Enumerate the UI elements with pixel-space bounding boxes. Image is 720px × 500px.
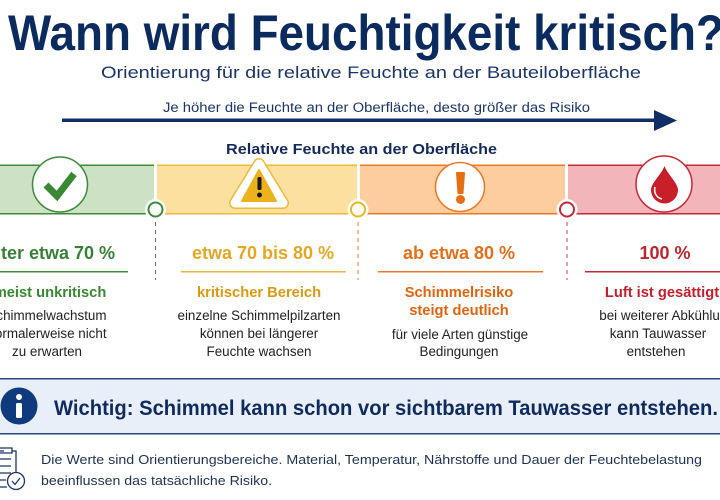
column: 100 %: Luft ist gesättigt bbox=[605, 285, 719, 301]
icon: info bbox=[0, 388, 38, 424]
column: ab etwa 80 %: für viele Arten günstige bbox=[392, 327, 528, 342]
arrow caption: Je höher die Feuchte an der Oberfläche, desto größer das Risiko bbox=[163, 100, 590, 115]
marker: green threshold bbox=[145, 199, 166, 280]
icon: exclamation circle bbox=[436, 162, 484, 212]
footnote: beeinflussen das tatsächliche Risiko. bbox=[41, 473, 272, 488]
column: 100 %: 100 % bbox=[639, 243, 691, 263]
panel: green band bbox=[0, 164, 154, 214]
column: etwa 70 bis 80 %: können bei längerer bbox=[200, 326, 319, 341]
column: unter etwa 70 %: zu erwarten bbox=[12, 344, 82, 359]
footnote bbox=[41, 452, 702, 488]
column: etwa 70 bis 80 %: Feuchte wachsen bbox=[207, 344, 311, 359]
column: etwa 70 bis 80 %: einzelne Schimmelpilzarten bbox=[178, 308, 340, 323]
icon: warning triangle bbox=[235, 164, 283, 203]
column: etwa 70 bis 80 % bbox=[178, 243, 346, 359]
icon: water drop bbox=[636, 156, 692, 212]
panel: orange band bbox=[360, 164, 565, 214]
column: unter etwa 70 % bbox=[0, 243, 128, 359]
column: 100 %: entstehen bbox=[627, 344, 685, 359]
panel: yellow band bbox=[157, 164, 357, 214]
column: ab etwa 80 % bbox=[378, 243, 543, 359]
column: ab etwa 80 %: ab etwa 80 % bbox=[403, 243, 515, 263]
marker: yellow threshold bbox=[348, 199, 368, 280]
column: 100 % bbox=[585, 243, 720, 359]
column: etwa 70 bis 80 %: etwa 70 bis 80 % bbox=[192, 243, 334, 263]
scale heading: Relative Feuchte an der Oberfläche bbox=[226, 141, 497, 158]
column: etwa 70 bis 80 %: kritischer Bereich bbox=[197, 285, 321, 301]
column: ab etwa 80 %: Schimmelrisiko bbox=[405, 285, 513, 301]
column: ab etwa 80 %: steigt deutlich bbox=[409, 303, 509, 319]
column: ab etwa 80 %: Bedingungen bbox=[420, 344, 498, 359]
icon: clipboard checklist bbox=[0, 448, 24, 490]
column: 100 %: kann Tauwasser bbox=[610, 326, 707, 341]
marker: red threshold bbox=[556, 199, 578, 280]
icon: check mark bbox=[32, 157, 88, 212]
arrow: increasing risk bbox=[62, 110, 677, 131]
footnote: Die Werte sind Orientierungsbereiche. Material, Temperatur, Nährstoffe und Dauer der Feuchtebelastung bbox=[41, 452, 702, 467]
callout: important note bbox=[0, 378, 720, 434]
subtitle: Orientierung für die relative Feuchte an der Bauteiloberfläche bbox=[101, 63, 641, 82]
panel: red band bbox=[568, 164, 720, 214]
